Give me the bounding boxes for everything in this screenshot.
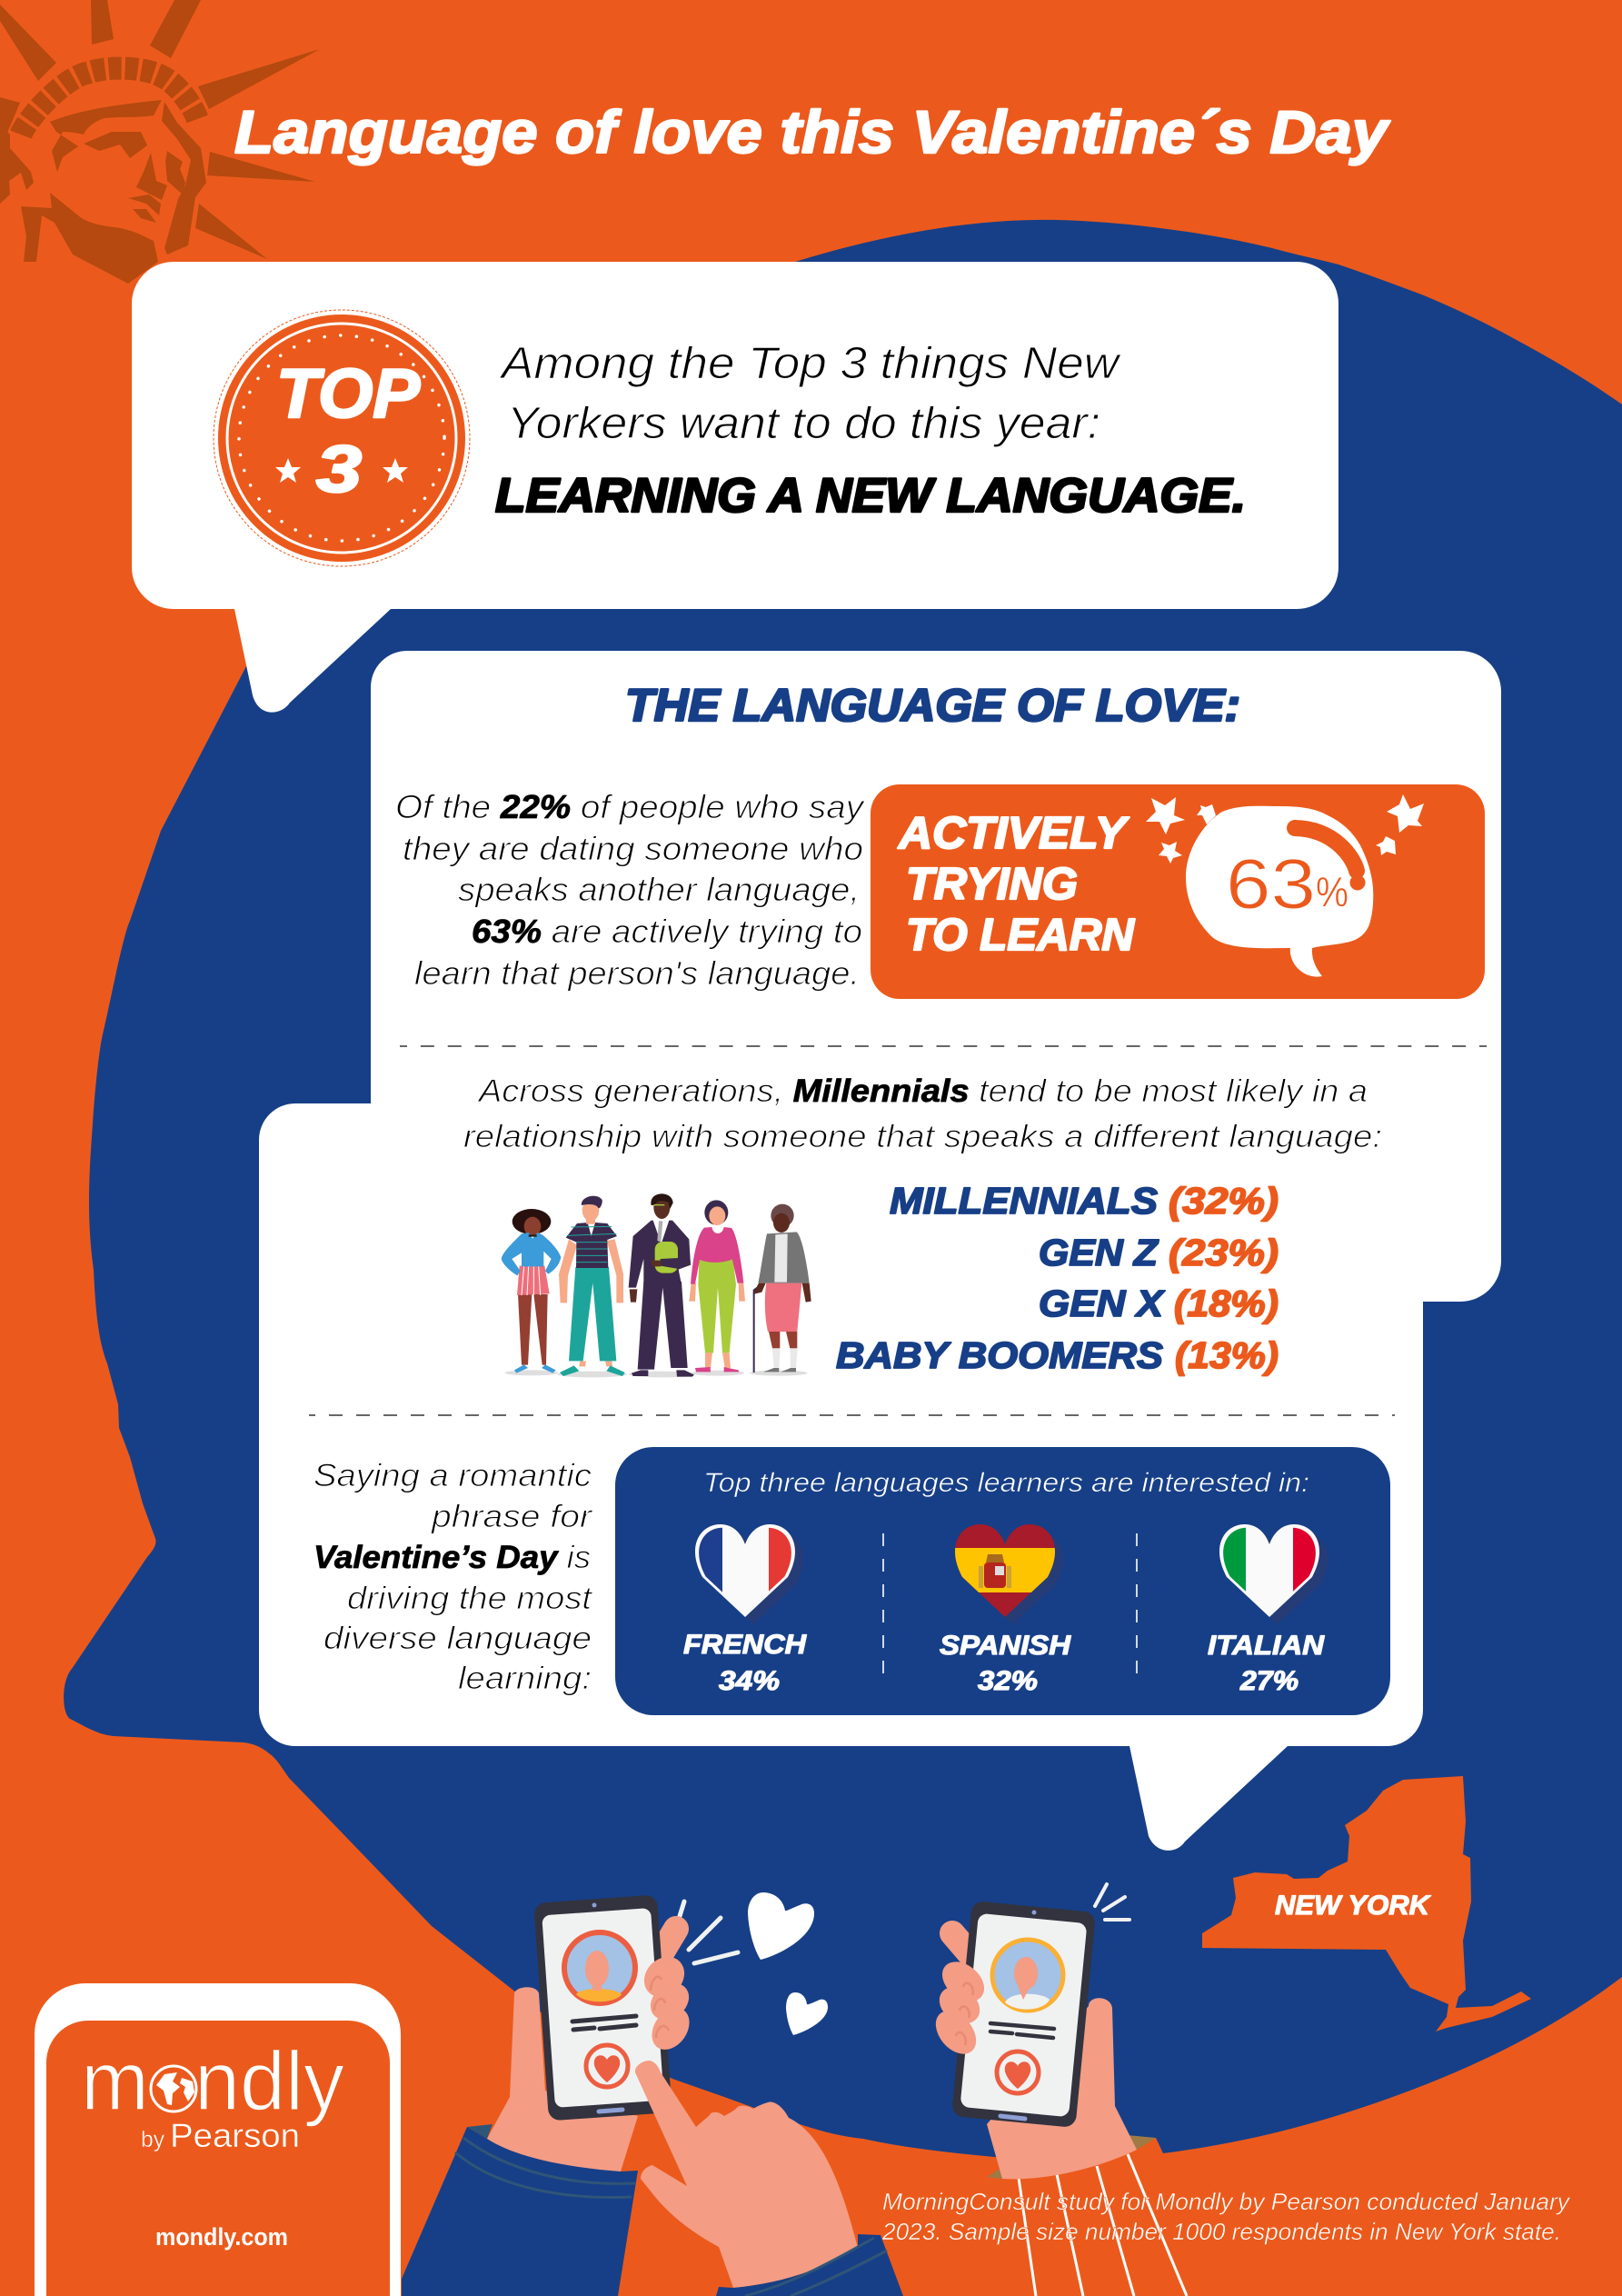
text: among the top 3: Among the Top 3 things New — [499, 339, 1122, 388]
text: source note — [881, 2188, 1571, 2245]
callout: actively trying to learn: ACTIVELY — [898, 809, 1130, 858]
text: source note: 2023. Sample size number 1000 respondents in New York state. — [881, 2218, 1561, 2245]
person 1 — [502, 1209, 561, 1373]
logo: by pearson: by — [141, 2127, 164, 2152]
chart: generations percentages list: (18%) — [1174, 1283, 1279, 1324]
text: across generations: relationship with someone that speaks a different language: — [463, 1119, 1382, 1154]
panel: main speech bubble — [259, 651, 1501, 1851]
heading: the language of love: THE LANGUAGE OF LOVE: — [625, 680, 1240, 731]
illustration: right sleeve with stripes — [987, 2135, 1199, 2296]
callout: actively trying to learn: TO LEARN — [906, 911, 1136, 960]
label: spanish 32 percent: 32% — [978, 1666, 1038, 1696]
text: saying a romantic phrase — [313, 1458, 592, 1696]
text: saying a romantic phrase: Saying a romantic — [313, 1458, 592, 1493]
text: saying a romantic phrase: Valentine’s Day is — [313, 1540, 591, 1575]
illustration: right hand behind phone — [952, 1933, 1137, 2179]
icon: white hearts — [748, 1892, 828, 2035]
icon: spanish flag heart — [955, 1524, 1063, 1624]
label: italian 27 percent: ITALIAN — [1208, 1631, 1325, 1661]
icon: french flag heart — [695, 1524, 803, 1624]
chart: generations percentages list: (23%) — [1169, 1232, 1279, 1273]
panel: top three languages: Top three languages learners are interested in: — [703, 1468, 1309, 1498]
panel: top three languages — [615, 1447, 1390, 1715]
link: mondly.com: mondly.com — [155, 2223, 288, 2251]
text: source note: MorningConsult study for Mondly by Pearson conducted January — [882, 2188, 1571, 2215]
title: Language of love this Valentine´s Day — [234, 98, 1391, 165]
text: across generations: Across generations, Millennials tend to be most likely in a — [477, 1073, 1368, 1109]
map: new york state — [1202, 1776, 1531, 2031]
map: new york state: NEW YORK — [1275, 1891, 1431, 1921]
person 3 — [629, 1193, 694, 1377]
icon: stars — [1146, 794, 1424, 863]
illustration: left hand fingers — [636, 1949, 697, 2057]
text: 22 percent paragraph: Of the 22% of people who say — [395, 788, 865, 825]
icon: globe — [151, 2066, 196, 2111]
badge: top 3: TOP — [276, 355, 420, 433]
chart: generations percentages list: BABY BOOMERS — [836, 1334, 1163, 1376]
text: saying a romantic phrase: diverse language — [323, 1621, 592, 1656]
illustration: five people of different generations — [502, 1193, 811, 1377]
icon: statue of liberty head — [0, 0, 320, 284]
logo: mondly: mondly — [81, 2035, 344, 2128]
person 4 — [689, 1200, 745, 1372]
label: italian 27 percent: 27% — [1239, 1666, 1299, 1696]
chart: generations percentages list: (32%) — [1169, 1180, 1279, 1222]
icon: spark lines left phone — [680, 1902, 738, 1963]
text: 22 percent paragraph: 63% are actively trying to — [472, 913, 862, 950]
illustration: right hand fingers — [928, 1953, 991, 2061]
icon: italian flag heart — [1219, 1524, 1328, 1624]
chart: generations percentages list: MILLENNIALS — [890, 1180, 1158, 1222]
icon: 63 percent speech bubble: % — [1316, 868, 1348, 915]
chart: generations percentages list: GEN X — [1039, 1283, 1166, 1324]
illustration: pointing hand — [635, 2061, 858, 2288]
label: spanish 32 percent — [940, 1631, 1071, 1696]
text: among the top 3 — [499, 339, 1122, 448]
text: 22 percent paragraph: speaks another language, — [458, 871, 860, 908]
text: saying a romantic phrase: learning: — [458, 1661, 592, 1696]
text: saying a romantic phrase: phrase for — [431, 1499, 592, 1534]
icon: right phone with dating profile — [951, 1901, 1096, 2128]
panel: mondly logo card — [35, 1983, 401, 2296]
chart: generations percentages list — [836, 1180, 1279, 1376]
text: 22 percent paragraph: they are dating someone who — [403, 830, 863, 867]
chart: generations percentages list: (13%) — [1175, 1334, 1279, 1376]
person 5 — [752, 1204, 811, 1373]
label: italian 27 percent — [1208, 1631, 1325, 1696]
text: among the top 3: Yorkers want to do this year: — [507, 399, 1100, 448]
icon: left phone with dating profile — [533, 1895, 672, 2121]
chart: generations percentages list: GEN Z — [1039, 1232, 1159, 1273]
label: spanish 32 percent: SPANISH — [940, 1631, 1071, 1661]
callout: actively trying to learn: TRYING — [906, 860, 1078, 909]
text: 22 percent paragraph — [395, 788, 865, 992]
callout: actively trying to learn — [871, 784, 1485, 999]
icon: spark lines right phone — [1095, 1884, 1129, 1920]
illustration: right sleeve — [716, 2234, 903, 2296]
badge: top 3: 3 — [316, 434, 362, 506]
icon: 63 percent speech bubble — [1186, 806, 1373, 977]
icon: 63 percent speech bubble: 63 — [1226, 844, 1316, 923]
illustration: left hand behind phone — [487, 1929, 676, 2171]
illustration: left sleeve — [402, 2124, 638, 2296]
label: french 34 percent — [683, 1630, 807, 1696]
text: across generations — [463, 1073, 1382, 1154]
badge: top 3 — [214, 310, 470, 566]
text: saying a romantic phrase: driving the most — [347, 1581, 592, 1616]
person 2 — [559, 1196, 625, 1376]
text: learning a new language: LEARNING A NEW LANGUAGE. — [495, 469, 1246, 523]
logo: by pearson: Pearson — [170, 2117, 300, 2154]
text: 22 percent paragraph: learn that person's language. — [414, 954, 860, 992]
panel: top 3 speech bubble — [132, 262, 1338, 713]
label: french 34 percent: FRENCH — [683, 1630, 807, 1660]
label: french 34 percent: 34% — [719, 1666, 780, 1696]
